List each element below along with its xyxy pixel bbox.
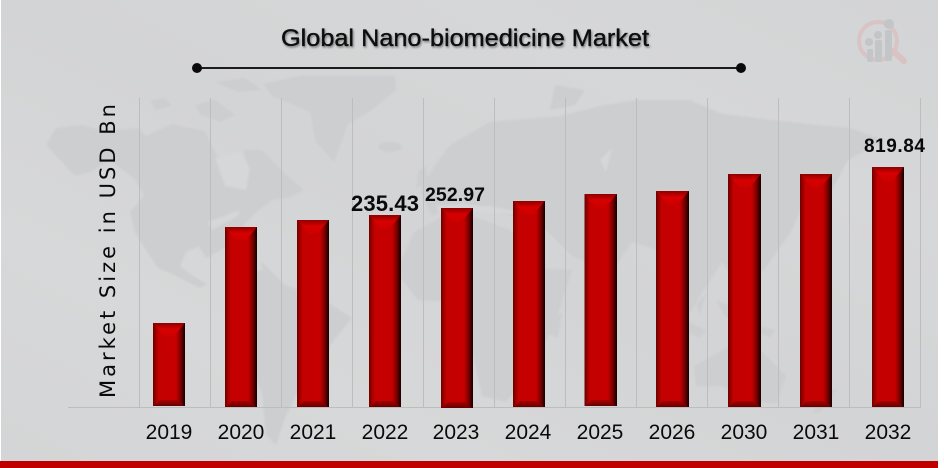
year 2030: 2030 [721, 421, 767, 444]
logo watermark [859, 19, 904, 62]
bar 2022 [369, 215, 401, 407]
map: Africa [396, 216, 572, 402]
map: Arctic Russia islands [550, 85, 690, 118]
year 2025: 2025 [577, 421, 623, 444]
map: Madagascar [548, 313, 562, 338]
value 2032: 819.84 [864, 136, 925, 157]
map: Britain [416, 166, 428, 188]
bar 2026 [656, 191, 689, 407]
title rule with end dots [192, 63, 746, 73]
bar chart [153, 167, 904, 408]
bar 2019 [153, 323, 185, 406]
world map watermark [46, 76, 884, 445]
year 2021: 2021 [290, 421, 336, 444]
bottom red band [0, 461, 938, 468]
map: Indonesia [658, 294, 775, 338]
year 2019: 2019 [146, 421, 192, 444]
year 2024: 2024 [505, 421, 552, 444]
value 2022: 235.43 [351, 191, 419, 216]
title: Global Nano-biomedicine Market [281, 25, 649, 52]
y axis label: Market Size in USD Bn [96, 104, 120, 398]
map: Hudson Bay and Mediterranean highlights [208, 148, 612, 276]
map: Eurasia [420, 100, 884, 322]
year 2020: 2020 [218, 421, 264, 444]
map: Arctic islands [150, 78, 262, 122]
x axis year labels [146, 421, 911, 444]
bar 2030 [728, 174, 761, 407]
logo: bars and nodes [865, 19, 894, 62]
year 2023: 2023 [433, 421, 479, 444]
bar 2031 [800, 174, 832, 407]
map: South America [230, 262, 352, 445]
map: Japan [760, 192, 776, 218]
year 2031: 2031 [793, 421, 839, 444]
value labels [351, 136, 925, 216]
grid lines [68, 98, 921, 408]
bar 2023 [441, 208, 473, 408]
bar 2024 [513, 201, 545, 407]
map: Iceland [378, 142, 402, 152]
logo: magnifier handle [893, 51, 904, 61]
bar 2021 [297, 220, 329, 407]
value 2023: 252.97 [425, 184, 485, 206]
year 2026: 2026 [649, 421, 695, 444]
logo: ring [859, 22, 897, 60]
bar 2025 [584, 194, 617, 406]
map: Greenland [263, 76, 396, 162]
map: New Zealand [812, 388, 838, 414]
year 2032: 2032 [865, 421, 911, 444]
year 2022: 2022 [362, 421, 408, 444]
map: Australia [694, 340, 786, 404]
bar 2020 [225, 227, 257, 407]
bar 2032 [872, 167, 904, 407]
map: North America [46, 124, 304, 288]
